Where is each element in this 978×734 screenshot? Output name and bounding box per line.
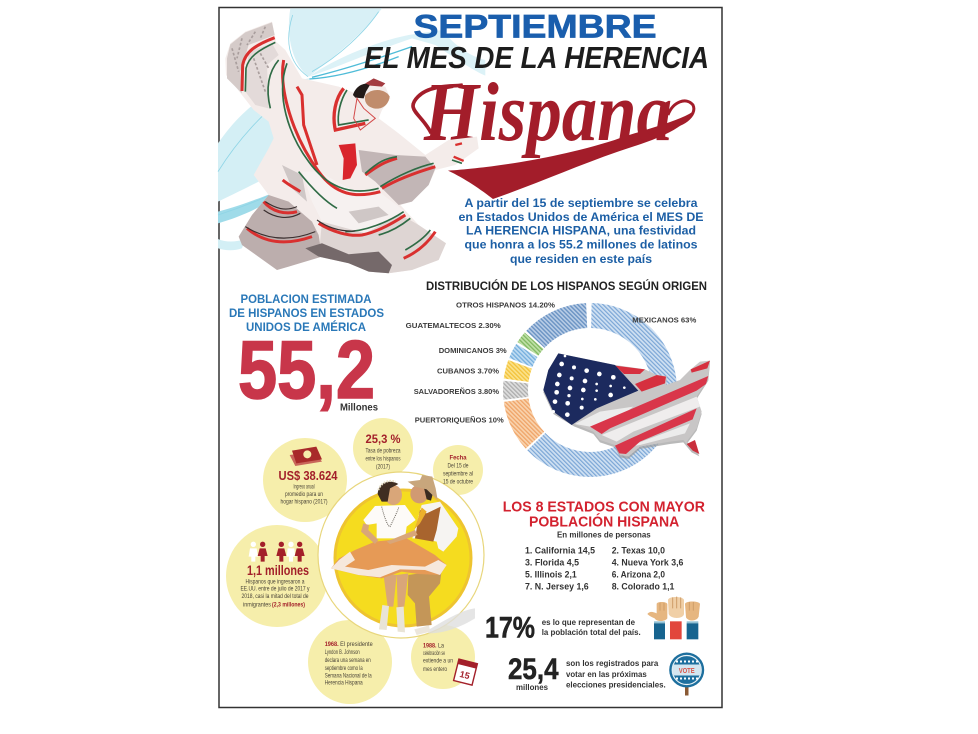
bubble: pobreza: 25,3 % xyxy=(366,432,401,446)
bubble: 1968: septiembre como la xyxy=(325,665,363,672)
donut labels: OTROS HISPANOS 14.20% xyxy=(456,301,555,310)
states list xyxy=(525,545,683,592)
bubble: 1968 xyxy=(325,641,373,687)
necklace xyxy=(354,98,375,130)
bubble: ingreso: Ingreso anual xyxy=(294,484,314,491)
yellow disc xyxy=(335,490,471,626)
intro paragraph: LA HERENCIA HISPANA, una festividad xyxy=(466,224,696,238)
states list: 4. Nueva York 3,6 xyxy=(612,557,683,568)
bubble: 1988: 1988. La xyxy=(423,642,444,649)
bubble: ingreso xyxy=(278,468,338,505)
bubble: 1968: Herencia Hispana xyxy=(325,680,363,687)
bubble: fecha: septiembre al xyxy=(443,470,473,477)
donut labels xyxy=(406,301,697,425)
heading: población estimada: POBLACION ESTIMADA xyxy=(240,292,372,306)
heading: población estimada: DE HISPANOS EN ESTADOS xyxy=(229,306,384,320)
bubble: 1988 xyxy=(423,642,453,673)
man's shirt xyxy=(412,502,458,552)
red stripes xyxy=(615,366,645,374)
icon: raised hands xyxy=(647,597,700,639)
outer ring xyxy=(318,472,484,638)
states list: 5. Illinois 2,1 xyxy=(525,569,577,580)
bubble: inmigrantes xyxy=(240,563,310,609)
stat 17% caption xyxy=(542,617,641,637)
stat 17% caption: es lo que representan de xyxy=(542,617,635,627)
heading: distribución: DISTRIBUCIÓN DE LOS HISPANOS SEGÚN ORIGEN xyxy=(426,278,707,293)
intro paragraph: en Estados Unidos de América el MES DE xyxy=(458,210,704,224)
dancing couple xyxy=(331,475,475,635)
rear ruffle xyxy=(359,150,435,205)
dancer in white dress xyxy=(225,22,479,273)
donut labels: DOMINICANOS 3% xyxy=(439,346,507,355)
man's boot xyxy=(414,625,430,635)
stat 25,4 caption: votar en las próximas xyxy=(566,669,647,679)
states list: 1. California 14,5 xyxy=(525,545,596,556)
bubble: 1968: declara una semana en xyxy=(325,657,371,664)
title: septiembre: SEPTIEMBRE xyxy=(414,8,656,44)
red sash xyxy=(339,143,357,180)
icon: people xyxy=(249,542,305,562)
heading: los 8 estados xyxy=(503,499,705,531)
bubble: pobreza xyxy=(366,432,401,470)
bubble: 1988: celebración se xyxy=(423,650,445,657)
heading: población estimada: UNIDOS DE AMÉRICA xyxy=(246,319,366,334)
man's head xyxy=(410,485,428,503)
white bands xyxy=(575,407,633,427)
bubble: pobreza: entre los hispanos xyxy=(366,455,400,462)
bubble: 1968: 1968. El presidente xyxy=(325,641,373,648)
bubble: inmigrantes: inmigrantes xyxy=(243,602,271,609)
bubble: inmigrantes: Hispanos que ingresaron a xyxy=(246,578,305,585)
stat 25,4 caption xyxy=(566,658,666,690)
stripes dark xyxy=(245,202,355,238)
swoosh and script flourish xyxy=(413,85,694,199)
bubble: inmigrantes: (2,3 millones) xyxy=(272,602,305,609)
intro paragraph: que residen en este país xyxy=(510,252,652,266)
stat 25,4 caption: elecciones presidenciales. xyxy=(566,680,666,690)
label millones: Millones xyxy=(340,402,378,414)
heading: los 8 estados: POBLACIÓN HISPANA xyxy=(529,513,679,531)
face xyxy=(365,90,390,109)
bubble: ingreso: hogar hispano (2017) xyxy=(280,498,328,505)
title: el mes de la herencia: EL MES DE LA HERENCIA xyxy=(364,41,709,75)
woman's boots xyxy=(379,605,405,632)
states list: 8. Colorado 1,1 xyxy=(612,581,675,592)
man's hat xyxy=(408,475,438,500)
man's trousers xyxy=(408,570,442,627)
stripes red xyxy=(242,38,464,258)
donut labels: GUATEMALTECOS 2.30% xyxy=(406,321,501,330)
donut chart xyxy=(516,316,664,464)
icon: calendar: 15 xyxy=(459,669,471,681)
man's vest xyxy=(415,507,441,542)
bubble: inmigrantes: 1,1 millones xyxy=(247,563,309,578)
heading: población estimada xyxy=(229,292,384,334)
stat 17% caption: la población total del país. xyxy=(542,627,641,637)
intro paragraph: que honra a los 55.2 millones de latinos xyxy=(464,238,698,252)
navy canton xyxy=(543,353,638,425)
stat 17%: 17% xyxy=(485,611,535,644)
bubble: pobreza: Tasa de pobreza xyxy=(366,447,401,454)
map: United States flag xyxy=(543,353,710,459)
woman's blouse xyxy=(363,505,416,538)
background ribbons xyxy=(218,8,485,250)
yellow info bubbles xyxy=(226,418,483,704)
subheading: en millones: En millones de personas xyxy=(557,530,651,540)
intro paragraph xyxy=(458,196,704,266)
bubble: fecha: Del 15 de xyxy=(448,462,469,469)
stat 25,4 caption: son los registrados para xyxy=(566,658,659,668)
skirt silhouette xyxy=(225,22,479,273)
woman's legs xyxy=(383,573,408,607)
icon: money stack xyxy=(290,447,322,466)
bubble: ingreso: promedio para un xyxy=(285,491,323,498)
icon: vote badge xyxy=(669,652,704,696)
heading: los 8 estados: LOS 8 ESTADOS CON MAYOR xyxy=(503,499,705,516)
donut labels: MEXICANOS 63% xyxy=(632,315,697,324)
big number 55,2: 55,2 xyxy=(238,323,375,416)
bubble: 1988: extiende a un xyxy=(423,657,453,664)
intro paragraph: A partir del 15 de septiembre se celebra xyxy=(464,196,698,210)
states list: 3. Florida 4,5 xyxy=(525,557,580,568)
man's scarf xyxy=(414,507,427,529)
white skirt panel xyxy=(302,172,405,233)
icon: vote badge: VOTE xyxy=(679,666,695,675)
bubble: 1968: Semana Nacional de la xyxy=(325,672,372,679)
lower grey ruffle xyxy=(239,195,322,270)
states list: 6. Arizona 2,0 xyxy=(612,569,665,580)
stat 25,4: 25,4 xyxy=(508,653,559,686)
bubble: 1968: Lyndon B. Johnson xyxy=(325,649,360,656)
states list: 7. N. Jersey 1,6 xyxy=(525,581,589,592)
icon: calendar xyxy=(454,659,477,685)
label millones: millones xyxy=(516,683,549,692)
shadow xyxy=(428,608,475,633)
woman's head xyxy=(385,485,402,505)
bubble: fecha: Fecha xyxy=(450,454,467,461)
raised ruffle shading xyxy=(227,22,275,93)
stripes green xyxy=(245,42,462,250)
bubble: fecha: 15 de octubre xyxy=(443,478,473,485)
bubble: inmigrantes: EE.UU. entre de julio de 2017 y xyxy=(240,586,310,593)
woman's arms xyxy=(361,523,418,544)
hair xyxy=(353,84,370,98)
bubble: inmigrantes: 2018, casi la mitad del total de xyxy=(242,593,309,600)
bubble: pobreza: (2017) xyxy=(376,463,390,470)
woman's skirt xyxy=(331,538,447,578)
headpiece xyxy=(365,78,385,87)
donut labels: PUERTORIQUEÑOS 10% xyxy=(415,416,504,425)
donut labels: SALVADOREÑOS 3.80% xyxy=(414,387,499,396)
stars xyxy=(552,355,626,417)
bubble: ingreso: US$ 38.624 xyxy=(278,468,338,483)
donut labels: CUBANOS 3.70% xyxy=(437,367,499,376)
states list: 2. Texas 10,0 xyxy=(612,545,665,556)
bubble: 1988: mes entero xyxy=(423,666,447,673)
title: hispana script: Hispana xyxy=(423,66,672,159)
poster frame xyxy=(219,8,722,708)
bubble: fecha xyxy=(443,454,473,485)
